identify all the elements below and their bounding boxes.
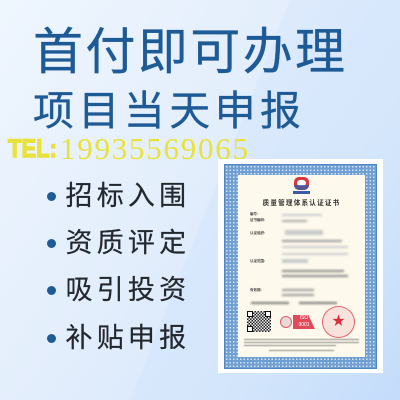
- certificate card: [218, 159, 383, 373]
- certificate fields: [250, 212, 350, 278]
- phone number: 19935569065: [60, 131, 250, 166]
- certificate paper: [238, 175, 365, 357]
- certificate fields: 证书编码:: [250, 218, 265, 222]
- item: qualification: 资质评定: [66, 228, 190, 258]
- logo: [293, 177, 310, 194]
- QR code: [247, 311, 271, 332]
- phone number: TEL:: [8, 134, 57, 163]
- title line two: 项目当天申报: [33, 88, 305, 134]
- item: investment: 吸引投资: [66, 274, 190, 304]
- dates: 有效期:: [250, 288, 262, 292]
- ISO badge: ISO: [300, 315, 308, 321]
- certificate fields: 编号:: [250, 212, 258, 216]
- certificate border: [224, 164, 377, 369]
- certificate fields: 认证范围:: [250, 259, 265, 263]
- certificate title: 质量管理体系认证证书: [263, 200, 340, 207]
- ISO badge: 9001: [298, 322, 310, 328]
- certificate fields: 认证组织:: [250, 231, 265, 235]
- list: services: [47, 180, 190, 352]
- item: bidding: 招标入围: [66, 180, 190, 210]
- footer small print: [244, 338, 360, 352]
- title line one: 首付即可办理: [33, 24, 347, 80]
- red seal: [322, 306, 355, 338]
- item: subsidy: 补贴申报: [66, 322, 190, 352]
- ISO badge: [280, 315, 315, 329]
- red seal: ★: [332, 313, 345, 328]
